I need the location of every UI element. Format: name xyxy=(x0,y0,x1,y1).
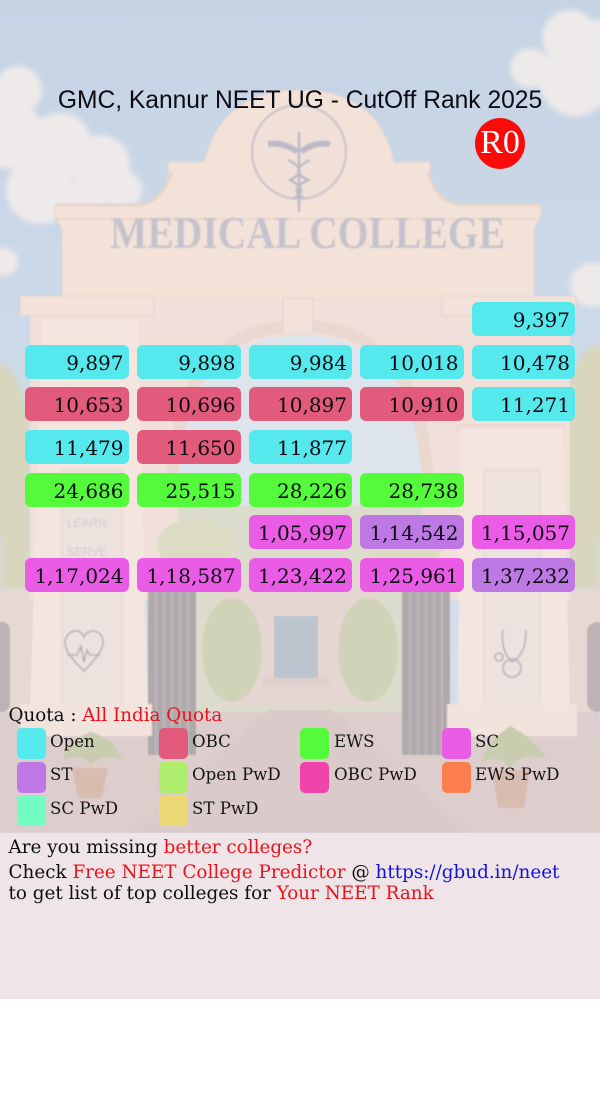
rank cell: 1,18,587 xyxy=(137,558,240,592)
rank cell: 9,898: 9,898 xyxy=(178,350,236,374)
rank cell: 10,653: 10,653 xyxy=(54,393,124,417)
background illustration: medical college gate xyxy=(0,0,600,833)
rank cell: 10,478 xyxy=(472,344,575,378)
clouds xyxy=(0,10,600,307)
rank cell: 10,018: 10,018 xyxy=(389,350,458,374)
legend label: SC: SC xyxy=(475,732,499,751)
stethoscope icon xyxy=(495,630,526,677)
gate wall xyxy=(30,300,570,600)
rank cell: 28,738 xyxy=(360,472,464,506)
quota heading: Quota : All India Quota xyxy=(8,705,222,726)
legend swatch: EWS xyxy=(300,728,329,759)
rank cell: 1,37,232: 1,37,232 xyxy=(481,564,570,588)
rank cell: 10,018 xyxy=(360,344,464,378)
right pillar xyxy=(455,424,565,430)
legend label: ST: ST xyxy=(50,765,72,784)
rank cell: 28,738: 28,738 xyxy=(389,478,458,502)
rank cell: 10,696: 10,696 xyxy=(166,393,236,417)
side trees xyxy=(0,344,600,590)
rank cell: 11,877 xyxy=(248,430,352,464)
side walls xyxy=(0,590,40,750)
footer line: predictor link: Check Free NEET College Predictor @ https://gbud.in/neet xyxy=(8,862,559,883)
rank cell: 1,23,422: 1,23,422 xyxy=(258,564,347,588)
legend label: OBC: OBC xyxy=(192,732,231,751)
rank cell: 24,686 xyxy=(25,472,128,506)
legend swatch: ST xyxy=(17,762,46,793)
rank cell: 10,478: 10,478 xyxy=(500,350,570,374)
legend label: OBC PwD: OBC PwD xyxy=(334,765,417,784)
rank cell: 11,271 xyxy=(472,387,575,421)
rank cell: 10,910 xyxy=(360,387,464,421)
pillar engraving: LEARN xyxy=(67,516,107,530)
rank cell: 1,23,422 xyxy=(248,558,352,592)
rank cell: 24,686: 24,686 xyxy=(54,478,124,502)
legend label: Open PwD: Open PwD xyxy=(192,765,281,784)
legend label: EWS PwD: EWS PwD xyxy=(475,765,559,784)
rank cell: 9,397: 9,397 xyxy=(513,308,570,332)
distant building xyxy=(222,575,378,705)
rank cell: 1,25,961 xyxy=(360,558,464,592)
legend label: Open: Open xyxy=(50,732,95,751)
potted plants xyxy=(64,732,122,766)
legend swatch: Open xyxy=(17,728,46,759)
rank cell: 1,05,997 xyxy=(248,515,352,549)
rank cell: 1,05,997: 1,05,997 xyxy=(258,521,347,545)
legend swatch: OBC PwD xyxy=(300,762,329,793)
rank cell: 1,14,542: 1,14,542 xyxy=(369,521,458,545)
legend swatch: SC PwD xyxy=(17,795,46,826)
left pillar xyxy=(30,318,148,715)
rank cell: 25,515: 25,515 xyxy=(166,478,236,502)
rank cell: 1,17,024: 1,17,024 xyxy=(34,564,124,588)
legend swatch: EWS PwD xyxy=(442,762,471,793)
rank cell: 11,650: 11,650 xyxy=(166,436,236,460)
rank cell: 1,37,232 xyxy=(472,558,575,592)
round badge xyxy=(475,118,525,169)
sign lettering: MEDICAL COLLEGE xyxy=(110,207,505,258)
rank cell: 1,17,024 xyxy=(25,558,128,592)
rank cell: 1,18,587: 1,18,587 xyxy=(146,564,236,588)
ground xyxy=(0,712,600,833)
arch opening xyxy=(178,335,422,600)
legend swatch: ST PwD xyxy=(159,795,188,826)
caduceus medallion xyxy=(252,105,346,199)
rank cell: 9,984 xyxy=(248,344,352,378)
legend label: EWS: EWS xyxy=(334,732,375,751)
rank cell: 1,25,961: 1,25,961 xyxy=(369,564,458,588)
inner trees xyxy=(157,519,443,702)
rank cell: 25,515 xyxy=(137,472,240,506)
cornices xyxy=(20,296,154,316)
rank cell: 9,897: 9,897 xyxy=(66,350,124,374)
footer line: your NEET rank: to get list of top colleges for Your NEET Rank xyxy=(8,883,434,904)
round badge: R0 xyxy=(480,124,520,161)
legend label: ST PwD: ST PwD xyxy=(192,799,258,818)
rank cell: 10,696 xyxy=(137,387,240,421)
rank cell: 9,984: 9,984 xyxy=(290,350,347,374)
rank cell: 28,226: 28,226 xyxy=(277,478,347,502)
heart icon xyxy=(65,631,103,671)
rank cell: 1,15,057 xyxy=(472,515,575,549)
rank cell: 10,897: 10,897 xyxy=(277,393,347,417)
footer line: missing better colleges: Are you missing better colleges? xyxy=(8,837,312,858)
footer panel xyxy=(0,833,600,999)
legend swatch: Open PwD xyxy=(159,762,188,793)
gates xyxy=(148,590,196,755)
rank cell: 28,226 xyxy=(248,472,352,506)
rank cell: 1,15,057: 1,15,057 xyxy=(481,521,570,545)
title: GMC, Kannur NEET UG - CutOff Rank 2025 xyxy=(58,87,542,114)
rank cell: 11,479 xyxy=(25,430,128,464)
rank cell: 11,479: 11,479 xyxy=(54,436,124,460)
legend label: SC PwD: SC PwD xyxy=(50,799,118,818)
rank cell: 10,897 xyxy=(248,387,352,421)
pediment xyxy=(55,90,541,300)
rank cell: 11,877: 11,877 xyxy=(277,436,347,460)
background illustration: medical college gate: SERVE xyxy=(67,545,107,559)
rank cell: 11,650 xyxy=(137,430,240,464)
rank cell: 10,910: 10,910 xyxy=(389,393,458,417)
rank cell: 1,14,542 xyxy=(360,515,464,549)
legend swatch: SC xyxy=(442,728,471,759)
rank cell: 11,271: 11,271 xyxy=(500,393,570,417)
rank cell: 9,898 xyxy=(137,344,240,378)
rank cell: 9,397 xyxy=(472,302,575,336)
rank cell: 10,653 xyxy=(25,387,128,421)
legend swatch: OBC xyxy=(159,728,188,759)
rank cell: 9,897 xyxy=(25,344,128,378)
